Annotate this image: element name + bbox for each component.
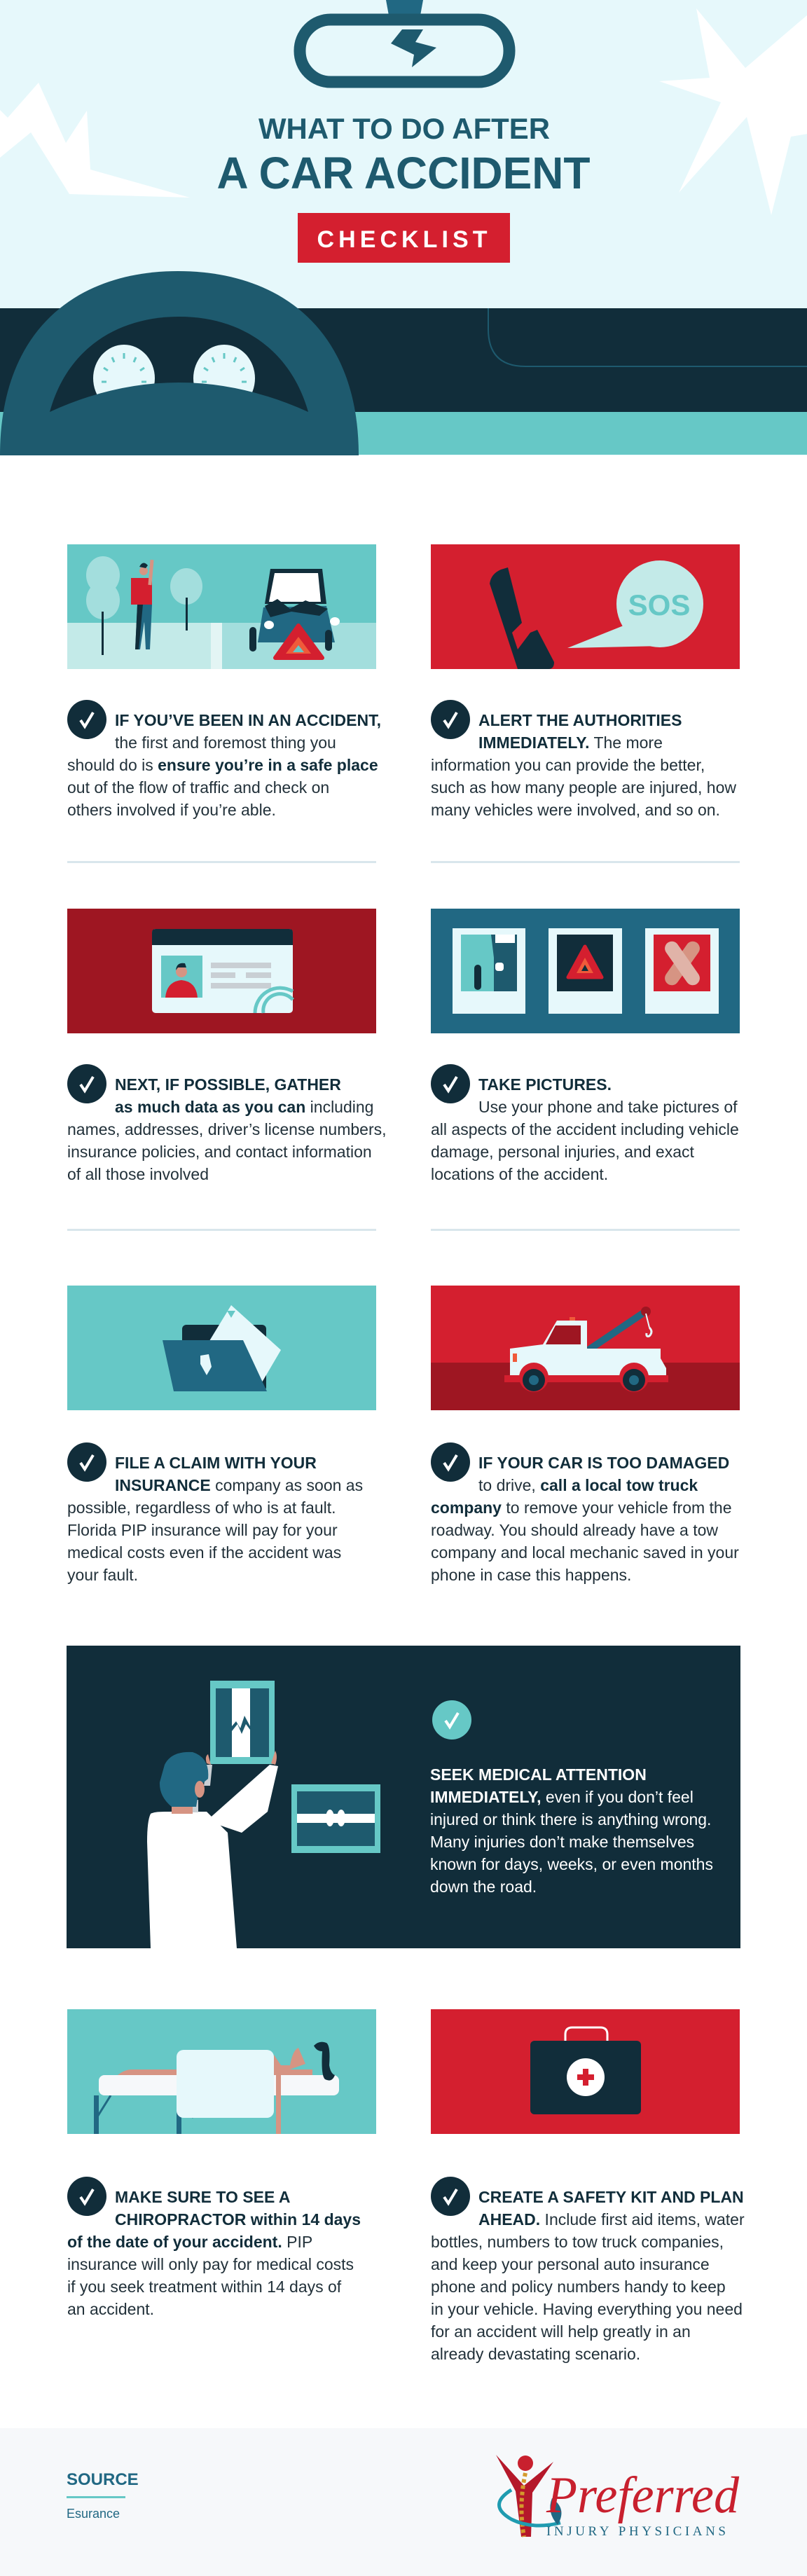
icon: SOS speech bubble: SOS bbox=[628, 588, 690, 621]
item 2 right: TAKE PICTURES. bbox=[478, 1075, 612, 1094]
checklist badge: CHECKLIST bbox=[317, 226, 488, 253]
icon: folder with document bbox=[163, 1305, 281, 1391]
item 5 left: an accident. bbox=[67, 2300, 154, 2318]
item 1 left: should do is ensure you’re in a safe place bbox=[67, 756, 378, 774]
item 2 left: insurance policies, and contact information bbox=[67, 1143, 372, 1161]
icon: warning triangle bbox=[275, 626, 322, 658]
item 1 left: the first and foremost thing you bbox=[115, 733, 336, 752]
item 3 right bbox=[431, 1442, 739, 1584]
text: medical: injured or think there is anything wrong. bbox=[430, 1810, 711, 1828]
icon: steering wheel with gauges bbox=[0, 271, 359, 455]
item 2 left bbox=[67, 1064, 387, 1183]
item 2 right: all aspects of the accident including vehicle bbox=[431, 1120, 739, 1138]
icon: massage table bbox=[94, 2042, 339, 2134]
item 2 right: damage, personal injuries, and exact bbox=[431, 1143, 694, 1161]
icon: right shatter star bbox=[659, 8, 807, 215]
logo: Preferred bbox=[546, 2467, 740, 2524]
icon: license card bbox=[152, 929, 293, 1013]
item 2 right: locations of the accident. bbox=[431, 1165, 608, 1183]
source block: Esurance bbox=[67, 2507, 120, 2521]
item 5 left: insurance will only pay for medical costs bbox=[67, 2255, 354, 2273]
icon: tow truck bbox=[504, 1307, 668, 1392]
item 5 left: CHIROPRACTOR within 14 days bbox=[115, 2210, 361, 2229]
icon: left shatter star bbox=[0, 83, 190, 198]
header bbox=[0, 0, 807, 455]
item 3 right: phone in case this happens. bbox=[431, 1566, 631, 1584]
item 3 left: possible, regardless of who is at fault. bbox=[67, 1499, 336, 1517]
panel: row 2 left illustration (ID card) bbox=[67, 909, 376, 1033]
dashboard bbox=[0, 308, 807, 455]
icon: photo car bbox=[453, 928, 525, 1014]
panel: row 1 left illustration (safe place) bbox=[67, 544, 376, 669]
icon: teal check bbox=[432, 1700, 471, 1740]
title: WHAT TO DO AFTER bbox=[258, 112, 550, 145]
text: medical: Many injuries don’t make themselves bbox=[430, 1833, 694, 1851]
icon: rear-view mirror bbox=[300, 0, 509, 82]
item 5 left bbox=[67, 2177, 361, 2318]
checklist badge bbox=[298, 213, 510, 263]
item 3 right: company to remove your vehicle from the bbox=[431, 1499, 732, 1517]
text: medical: down the road. bbox=[430, 1878, 537, 1896]
icon: doctor with x-rays bbox=[147, 1681, 380, 1948]
item 1 right: IMMEDIATELY. The more bbox=[478, 733, 663, 752]
item 3 right: roadway. You should already have a tow bbox=[431, 1521, 718, 1539]
logo bbox=[496, 2455, 740, 2539]
text: medical: IMMEDIATELY, even if you don’t feel bbox=[430, 1788, 694, 1806]
item 3 right: company and local mechanic saved in your bbox=[431, 1543, 739, 1562]
panel: row 1 right illustration (SOS call) bbox=[431, 544, 740, 669]
item 3 left: your fault. bbox=[67, 1566, 138, 1584]
icon: crashed car bbox=[249, 569, 340, 652]
item 3 right: IF YOUR CAR IS TOO DAMAGED bbox=[478, 1454, 729, 1472]
item 2 left: as much data as you can including bbox=[115, 1098, 373, 1116]
item 2 right bbox=[431, 1064, 739, 1183]
item 1 right: ALERT THE AUTHORITIES bbox=[478, 711, 682, 729]
item 5 right: in your vehicle. Having everything you need bbox=[431, 2300, 743, 2318]
item 1 right bbox=[431, 700, 736, 819]
item 5 left: of the date of your accident. PIP bbox=[67, 2233, 312, 2251]
item 1 right: such as how many people are injured, how bbox=[431, 778, 736, 797]
item 3 left bbox=[67, 1442, 363, 1584]
item 3 left: Florida PIP insurance will pay for your bbox=[67, 1521, 338, 1539]
item 3 left: FILE A CLAIM WITH YOUR bbox=[115, 1454, 317, 1472]
item 5 right: CREATE A SAFETY KIT AND PLAN bbox=[478, 2188, 744, 2206]
item 5 right: already devastating scenario. bbox=[431, 2345, 640, 2363]
icon: trees bbox=[86, 556, 202, 655]
logo: INJURY PHYSICIANS bbox=[546, 2524, 726, 2539]
item 5 right: bottles, numbers to tow truck companies, bbox=[431, 2233, 724, 2251]
text: medical: SEEK MEDICAL ATTENTION bbox=[430, 1765, 647, 1784]
item 1 right: many vehicles were involved, and so on. bbox=[431, 801, 720, 819]
item 5 left: if you seek treatment within 14 days of bbox=[67, 2278, 341, 2296]
item 1 left: others involved if you’re able. bbox=[67, 801, 276, 819]
item 5 left: MAKE SURE TO SEE A bbox=[115, 2188, 290, 2206]
source block bbox=[67, 2470, 139, 2521]
item 1 left bbox=[67, 700, 381, 819]
item 2 left: of all those involved bbox=[67, 1165, 209, 1183]
item 3 left: INSURANCE company as soon as bbox=[115, 1476, 363, 1494]
footer bbox=[0, 2428, 807, 2576]
icon: SOS speech bubble bbox=[567, 560, 703, 648]
item 5 right: and keep your personal auto insurance bbox=[431, 2255, 710, 2273]
item 3 right: to drive, call a local tow truck bbox=[478, 1476, 698, 1494]
item 5 right bbox=[431, 2177, 745, 2363]
panel: row 3 right illustration (tow truck) bbox=[431, 1286, 740, 1410]
panel: row 3 left illustration (insurance folder) bbox=[67, 1286, 376, 1410]
item 1 left: IF YOU’VE BEEN IN AN ACCIDENT, bbox=[115, 711, 381, 729]
item 2 left: NEXT, IF POSSIBLE, GATHER bbox=[115, 1075, 341, 1094]
item 1 right: information you can provide the better, bbox=[431, 756, 705, 774]
panel: row 2 right illustration (photos) bbox=[431, 909, 740, 1033]
text: medical bbox=[430, 1765, 713, 1896]
item 2 left: names, addresses, driver’s license numbers, bbox=[67, 1120, 387, 1138]
item 3 left: medical costs even if the accident was bbox=[67, 1543, 341, 1562]
item 5 right: for an accident will help greatly in an bbox=[431, 2322, 691, 2341]
title bbox=[217, 112, 590, 198]
source block: SOURCE bbox=[67, 2470, 139, 2489]
panel: row 5 right illustration (safety kit) bbox=[431, 2009, 740, 2134]
item 5 right: AHEAD. Include first aid items, water bbox=[478, 2210, 745, 2229]
item 5 right: phone and policy numbers handy to keep bbox=[431, 2278, 726, 2296]
icon: person bbox=[131, 560, 154, 649]
panel: row 5 left illustration (chiropractor) bbox=[67, 2009, 376, 2134]
title: A CAR ACCIDENT bbox=[217, 148, 590, 198]
item 2 right: Use your phone and take pictures of bbox=[478, 1098, 738, 1116]
icon: phone handset bbox=[490, 567, 554, 669]
item 1 left: out of the flow of traffic and check on bbox=[67, 778, 329, 797]
icon: photo bandage bbox=[645, 928, 719, 1014]
text: medical: known for days, weeks, or even months bbox=[430, 1855, 713, 1873]
icon: check bbox=[67, 700, 106, 739]
panel: seek medical attention bbox=[67, 1646, 740, 1948]
icon: first aid kit bbox=[530, 2027, 641, 2114]
icon: photo triangle bbox=[549, 928, 622, 1014]
